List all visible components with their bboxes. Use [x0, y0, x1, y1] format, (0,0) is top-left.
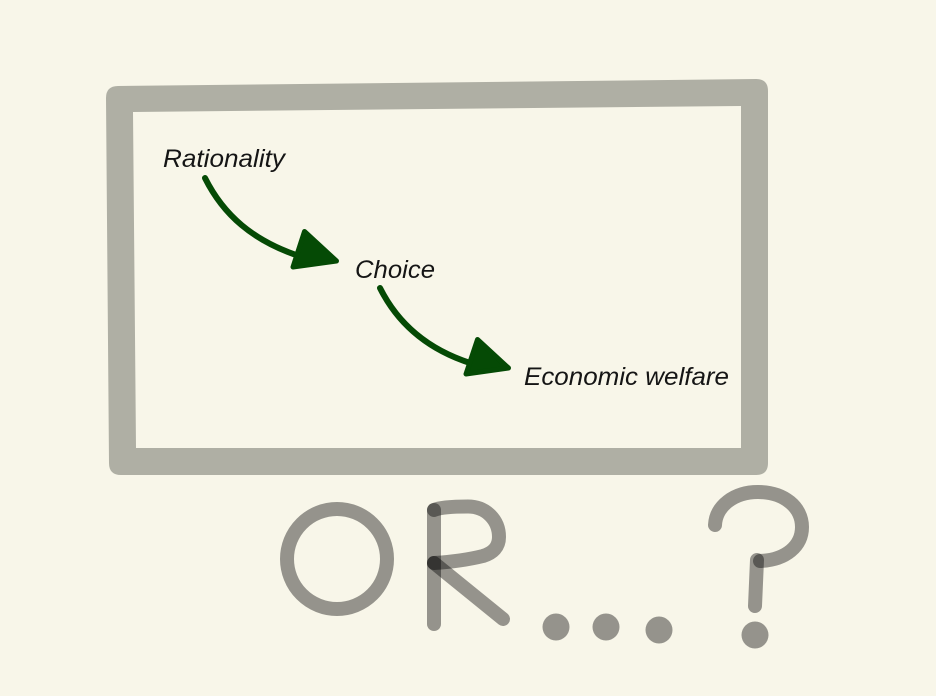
- letter: R: [434, 506, 503, 624]
- text: Economic welfare: Economic welfare: [524, 363, 729, 391]
- text: Choice: Choice: [355, 256, 435, 284]
- text: Rationality: Rationality: [163, 145, 287, 173]
- panel: hand-drawn rectangular frame: [106, 79, 768, 475]
- arrow: Rationality to Choice: [205, 178, 336, 267]
- ellipsis dots: [542, 614, 672, 644]
- question mark: [715, 492, 802, 648]
- letter: O: [287, 509, 387, 609]
- arrow: Choice to Economic welfare: [380, 288, 508, 374]
